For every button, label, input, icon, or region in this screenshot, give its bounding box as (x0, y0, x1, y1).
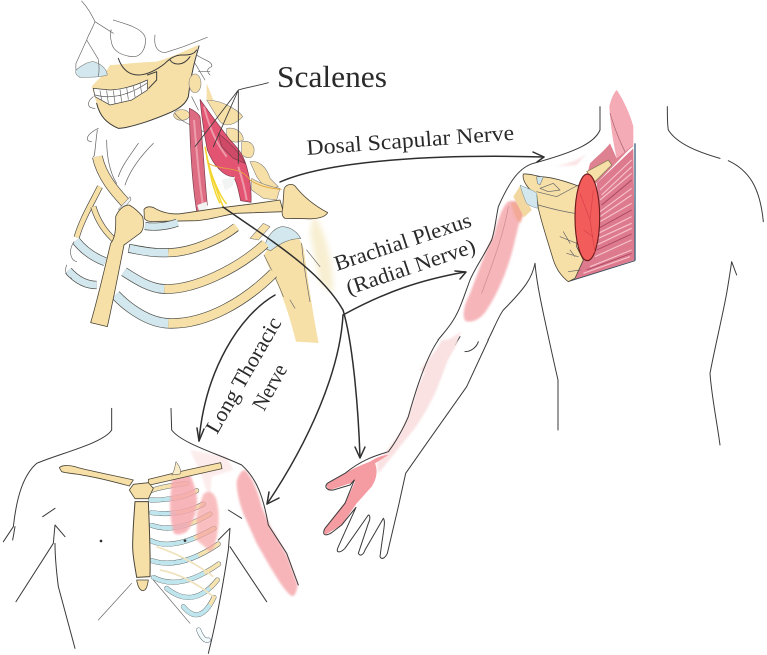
torso left outline (535, 263, 558, 430)
body outline left (438, 107, 600, 340)
ribs right (116, 222, 274, 323)
supraspinous tendon (587, 160, 612, 182)
arrowhead: chest arm (267, 492, 279, 504)
label: Nerve: Nerve (247, 360, 292, 414)
arrowhead: arm (455, 271, 466, 279)
panel: neck and upper thorax skeleton (66, 1, 333, 343)
torso right outline (710, 262, 737, 445)
manubrium (129, 483, 153, 499)
scapula detail (537, 177, 543, 185)
arm muscle line (482, 207, 508, 293)
muscle lower edge (569, 261, 635, 281)
heading: Scalenes: Scalenes (277, 59, 387, 94)
panel: back and shoulder view (420, 90, 763, 445)
trigger point ellipse (575, 174, 600, 261)
label: Radial Nerve: (Radial Nerve) (343, 234, 479, 300)
pale arm shading (420, 153, 587, 380)
shoulder shading (190, 450, 233, 500)
right shoulder outline (171, 408, 298, 585)
jaw outline (97, 46, 199, 128)
hand pain zone (323, 455, 388, 535)
neck ligament lines (93, 130, 153, 185)
jaw bone (92, 45, 198, 128)
nerves (205, 147, 282, 207)
right clavicle (148, 463, 222, 485)
humeral head (264, 227, 301, 251)
shoulder pale shading (310, 213, 333, 293)
muscle right edge (633, 143, 637, 261)
ribs cage (151, 483, 219, 640)
pale inter ribs (157, 547, 213, 597)
darker fibres (587, 180, 632, 270)
skull outline (76, 1, 207, 77)
forearm outline (324, 340, 488, 558)
panel: front torso view (3, 408, 298, 653)
ellipse veins (580, 190, 595, 253)
forearm pale shading (377, 340, 458, 473)
xiphoid (137, 580, 148, 591)
label: Dosal Scapular Nerve: Dosal Scapular Nerve (306, 120, 515, 160)
hyoid (87, 97, 98, 142)
label: Brachial Plexus: Brachial Plexus (331, 208, 474, 276)
nose midline (97, 60, 100, 76)
upper muscle (587, 143, 633, 183)
nipples (100, 539, 186, 542)
arrow: brachial plexus (343, 271, 466, 315)
chest muscle pain zone lower (197, 492, 219, 552)
humerus (264, 232, 319, 343)
scalene pointer lines (195, 83, 268, 163)
arrow: long thoracic nerve (197, 295, 275, 441)
clavicle end cap (118, 197, 131, 211)
arrowhead: scapular (533, 152, 544, 162)
left arm inner outline (16, 508, 75, 648)
torso outline (3, 408, 112, 542)
left clavicle (59, 466, 133, 486)
elbow crease (465, 342, 478, 352)
trapezius (609, 90, 633, 158)
ribs left (66, 187, 116, 285)
proximal clavicle (97, 157, 125, 203)
scalene muscle: anterior (189, 108, 207, 212)
lower chest lines (98, 580, 190, 623)
acromion line (537, 183, 580, 272)
humerus head (513, 186, 532, 217)
clavicle (144, 200, 283, 222)
arrow: dorsal scapular nerve (280, 152, 544, 182)
teeth lines (95, 83, 147, 103)
sternum body (133, 502, 150, 577)
cartilage blue (520, 185, 538, 208)
scapula (523, 174, 583, 282)
trapezius line (610, 113, 625, 152)
label: Long Thoracic: Long Thoracic (201, 313, 286, 438)
teeth (93, 80, 147, 105)
arrow: long nerve to hand and arm (223, 207, 365, 458)
acromion (282, 184, 328, 219)
chest muscle pain zone upper (170, 475, 197, 534)
arrowhead: hand (355, 447, 365, 458)
scalene muscle: posterior (218, 133, 245, 163)
proximal clavicle shadow (97, 157, 125, 203)
first rib tip (172, 462, 181, 475)
arm pain zone (237, 470, 298, 596)
arrowhead: thoracic (197, 428, 204, 441)
humeral head overlap (511, 202, 526, 223)
panel: forearm and hand (323, 340, 488, 558)
humerus contour (264, 243, 320, 308)
muscle fibres (194, 107, 247, 203)
muscle tendon highlights (197, 177, 235, 212)
scalene muscle: middle (200, 99, 251, 202)
nose cartilage (76, 62, 107, 77)
cervical spine (174, 55, 280, 200)
rhomboid muscle (575, 148, 635, 279)
inner arm outline (455, 263, 535, 345)
glenoid bone stub (250, 223, 270, 240)
muscle fibres (583, 160, 632, 273)
right arm inner outline (208, 510, 267, 653)
neck and shoulder right outline (667, 107, 763, 222)
arm pain zone (464, 201, 523, 322)
arrow: branch to chest arm (267, 315, 343, 504)
sternum (91, 205, 143, 327)
